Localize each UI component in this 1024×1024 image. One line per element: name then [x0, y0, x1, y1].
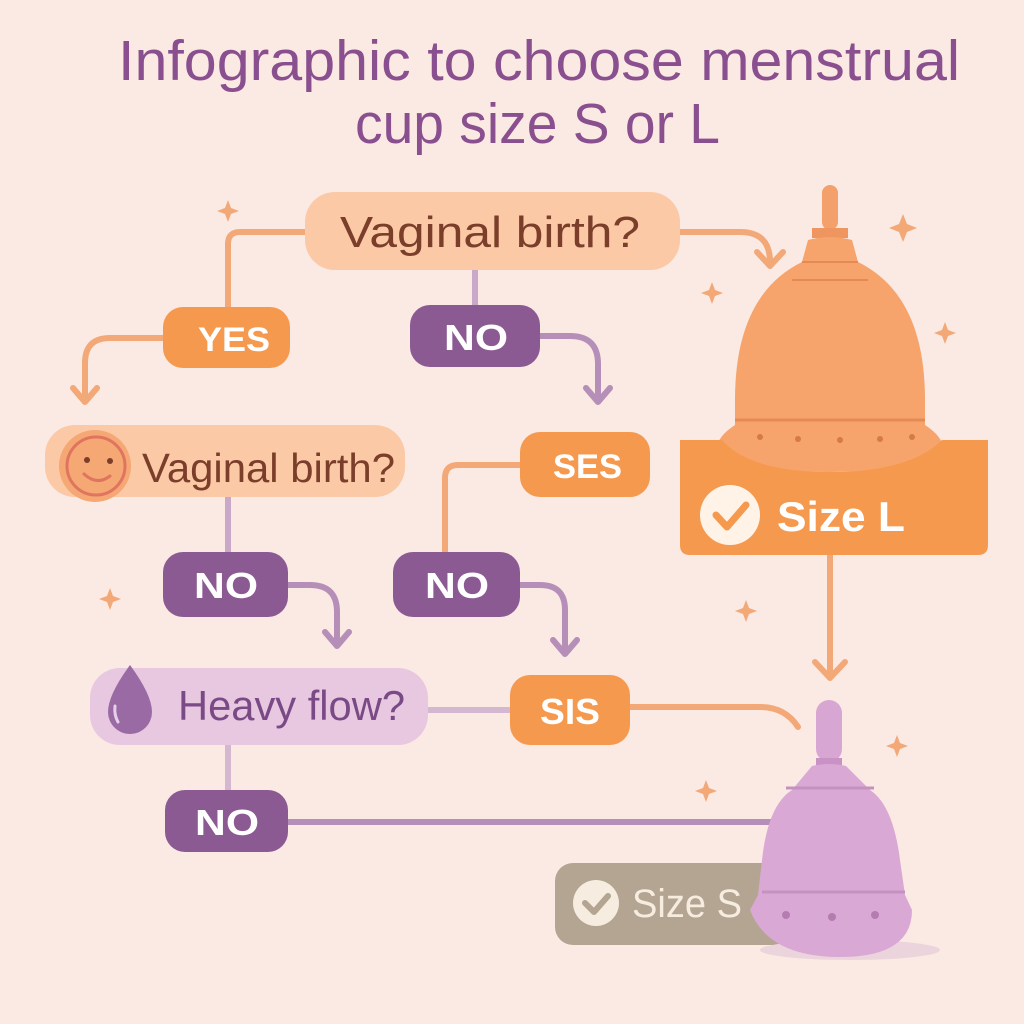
question: Vaginal birth? (top): Vaginal birth?: [340, 208, 640, 257]
SIS box: [510, 675, 630, 745]
result: Size L: [680, 440, 988, 555]
SES box: [520, 432, 650, 497]
SES box: SES: [553, 448, 622, 486]
NO box (bottom): NO: [195, 802, 259, 843]
question: Vaginal birth? (top): [305, 192, 680, 270]
question: Heavy flow?: [90, 665, 428, 745]
NO box (top): NO: [444, 317, 508, 358]
title: cup size S or L: [355, 92, 720, 156]
title: Infographic to choose menstrual: [118, 29, 960, 93]
NO box (top): [410, 305, 540, 367]
decorative sparkles: [99, 200, 956, 802]
title: [118, 29, 960, 156]
NO box (left): [163, 552, 288, 617]
YES box: YES: [198, 321, 270, 359]
NO box (middle): [393, 552, 520, 617]
Size S cup: [750, 700, 940, 960]
connectors: [73, 232, 845, 822]
Size L cup: [717, 185, 943, 472]
result: Size S: Size S: [632, 882, 742, 926]
SIS box: SIS: [540, 691, 600, 732]
result: Size L: Size L: [777, 493, 905, 540]
NO box (bottom): [165, 790, 288, 852]
result: Size S: [555, 863, 795, 945]
question: Vaginal birth? (left): Vaginal birth?: [142, 445, 395, 491]
question: Heavy flow?: Heavy flow?: [178, 682, 405, 729]
NO box (middle): NO: [425, 565, 489, 606]
question: Vaginal birth? (left): [45, 425, 405, 502]
YES box: [163, 307, 290, 368]
NO box (left): NO: [194, 565, 258, 606]
